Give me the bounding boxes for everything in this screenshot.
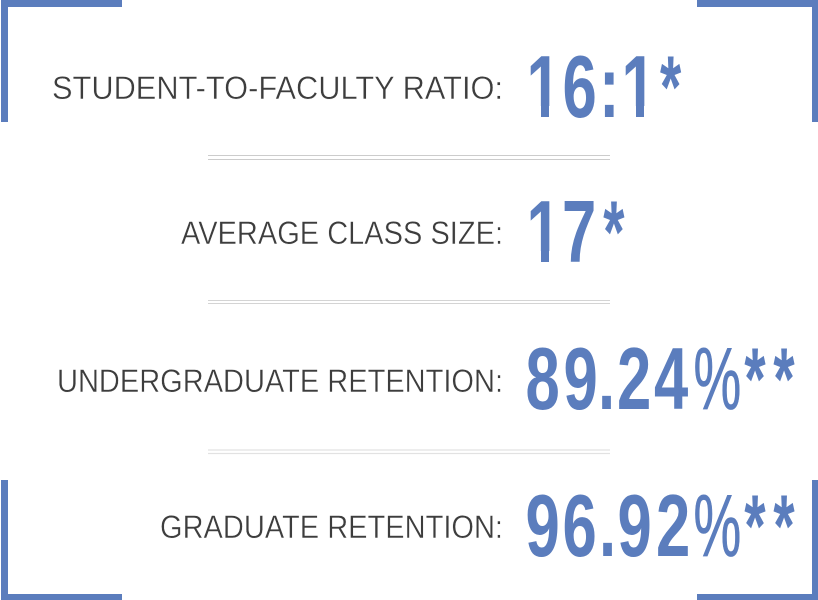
row: graduate retention bbox=[160, 477, 795, 576]
bracket: bottom left bbox=[1, 480, 122, 600]
value: 89.24%: % bbox=[694, 331, 741, 428]
label: undergraduate retention: UNDERGRADUATE RETENTION: bbox=[57, 363, 503, 399]
row: undergraduate retention bbox=[57, 330, 795, 429]
row: average class size bbox=[181, 183, 625, 282]
value: 96.92%: 96.92 bbox=[525, 477, 690, 576]
value: 96.92% bbox=[525, 477, 795, 576]
bracket: top left bbox=[1, 0, 122, 122]
value: 89.24%: 89.24 bbox=[525, 330, 688, 429]
value: 89.24%: ** bbox=[744, 330, 795, 428]
label: average class size: AVERAGE CLASS SIZE: bbox=[181, 215, 503, 251]
value: 17: * bbox=[603, 183, 625, 281]
row: student-to-faculty ratio bbox=[52, 38, 682, 137]
value: 17: 17 bbox=[526, 183, 596, 282]
value: 17 bbox=[524, 183, 625, 282]
value: 16:1: * bbox=[660, 38, 682, 136]
bracket: bottom right bbox=[697, 480, 818, 600]
bracket: top right bbox=[697, 0, 818, 122]
label: graduate retention: GRADUATE RETENTION: bbox=[160, 509, 503, 545]
value: 96.92%: ** bbox=[744, 477, 795, 575]
label: student-to-faculty ratio: STUDENT-TO-FACULTY RATIO: bbox=[52, 70, 503, 106]
value: 96.92%: % bbox=[694, 478, 741, 575]
value: 89.24% bbox=[525, 330, 795, 429]
value: 16:1: 16:1 bbox=[526, 38, 656, 137]
